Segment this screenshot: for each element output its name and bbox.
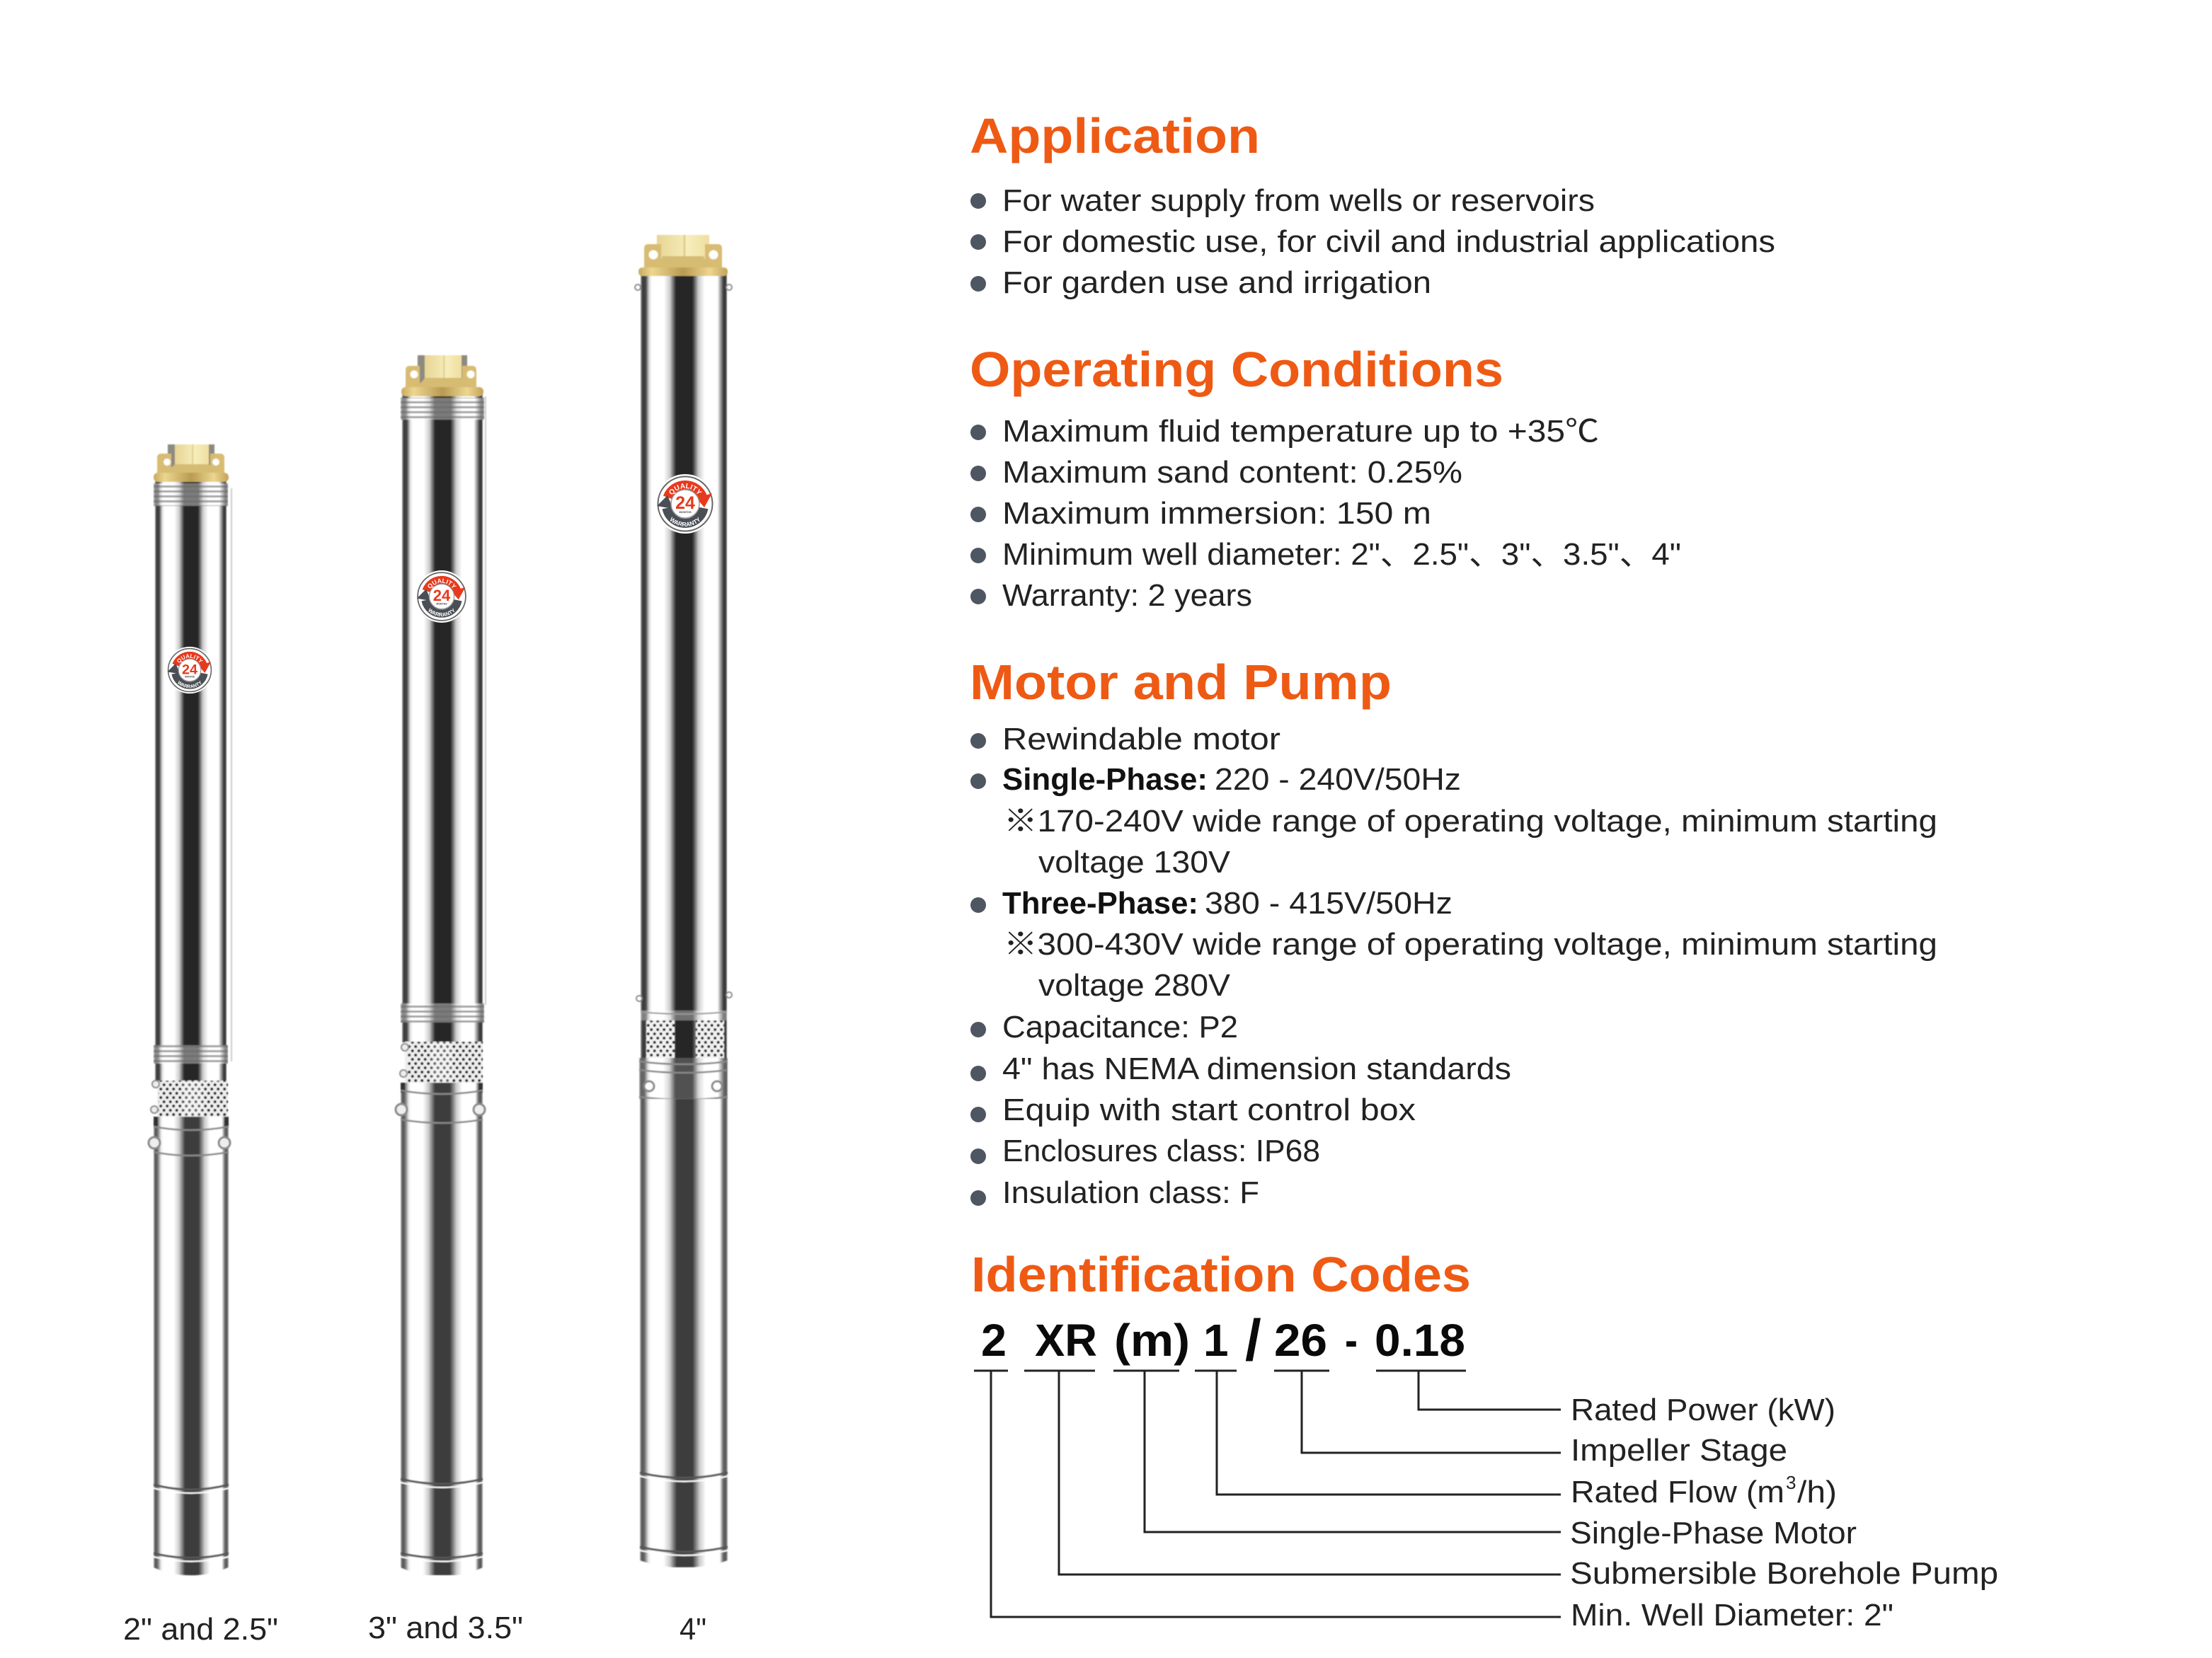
badge: 24 months quality warranty xyxy=(657,474,714,534)
bullet list: application xyxy=(970,183,1775,300)
model code: / xyxy=(1245,1308,1261,1373)
model code: XR xyxy=(1035,1315,1097,1366)
pump: 4 inch xyxy=(634,234,733,1568)
pump size labels: 2" and 2.5" xyxy=(123,1612,278,1647)
badge: 24 months quality warranty: MONTHS xyxy=(679,510,692,514)
badge: 24 months quality warranty: QUALITY xyxy=(670,483,702,494)
heading: application: Application xyxy=(970,108,1260,163)
badge: 24 months quality warranty: WARRANTY xyxy=(670,517,699,526)
model code: 1 xyxy=(1203,1315,1229,1366)
panel: identification codes xyxy=(971,1247,1998,1633)
bullet list: motor and pump: Single-Phase: xyxy=(1002,762,1208,797)
bullet list: motor and pump: Equip with start control box xyxy=(1002,1093,1416,1127)
bullet list: motor and pump: 220 - 240V/50Hz xyxy=(1215,762,1461,797)
bullet list: motor and pump: voltage 280V xyxy=(1038,968,1231,1003)
pump: 3 inch and 3.5 inch xyxy=(394,355,487,1576)
panel: operating conditions xyxy=(970,342,1681,613)
badge: 24 months quality warranty: QUALITY xyxy=(428,579,457,588)
badge: 24 months quality warranty: MONTHS xyxy=(185,675,195,678)
bullet list: operating conditions: Maximum fluid temperature up to +35℃ xyxy=(1002,414,1599,449)
bullet list: motor and pump: 380 - 415V/50Hz xyxy=(1205,886,1452,921)
pump size labels: 3" and 3.5" xyxy=(368,1611,523,1645)
bullet list: application: For water supply from wells or reservoirs xyxy=(1002,183,1595,218)
heading: operating conditions: Operating Conditions xyxy=(970,342,1503,397)
bullet list: operating conditions: Warranty: 2 years xyxy=(1002,578,1252,613)
model code: 26 xyxy=(1274,1315,1327,1366)
bullet list: operating conditions: Maximum immersion: 150 m xyxy=(1002,496,1431,531)
badge: 24 months quality warranty: WARRANTY xyxy=(429,608,454,617)
bullet list: motor and pump: ※170-240V wide range of operating voltage, minimum starting xyxy=(1004,804,1937,839)
code legend labels: Impeller Stage xyxy=(1571,1433,1787,1468)
bullet list: motor and pump: Enclosures class: IP68 xyxy=(1002,1134,1320,1168)
badge: 24 months quality warranty xyxy=(416,570,466,623)
code legend labels: Single-Phase Motor xyxy=(1570,1516,1857,1550)
badge: 24 months quality warranty: WARRANTY xyxy=(178,681,201,688)
model code: - xyxy=(1345,1315,1358,1366)
bullet list: motor and pump: Three-Phase: xyxy=(1002,886,1198,921)
bullet list: operating conditions xyxy=(970,414,1681,613)
code legend labels: 3 xyxy=(1786,1472,1796,1493)
model code xyxy=(981,1308,1465,1373)
code legend labels: Rated Flow (m xyxy=(1571,1475,1784,1509)
bullet list: operating conditions: Maximum sand content: 0.25% xyxy=(1002,455,1462,490)
badge: 24 months quality warranty: MONTHS xyxy=(436,602,447,605)
model code: 2 xyxy=(981,1315,1007,1366)
code legend labels: Rated Power (kW) xyxy=(1571,1393,1835,1427)
badge: 24 months quality warranty xyxy=(167,647,212,693)
bullet list: operating conditions: Minimum well diameter: 2"、2.5"、3"、3.5"、4" xyxy=(1002,537,1681,572)
panel: application xyxy=(970,108,1775,300)
code connector lines xyxy=(974,1371,1561,1617)
bullet list: motor and pump: Insulation class: F xyxy=(1002,1175,1259,1210)
bullet list: motor and pump: ※300-430V wide range of operating voltage, minimum starting xyxy=(1004,927,1937,962)
heading: identification codes: Identification Codes xyxy=(971,1247,1471,1302)
bullet list: motor and pump: Capacitance: P2 xyxy=(1002,1010,1238,1044)
bullet list: motor and pump: Rewindable motor xyxy=(1002,722,1280,756)
bullet list: motor and pump xyxy=(970,722,1937,1210)
badge: 24 months quality warranty: 24 xyxy=(675,493,695,513)
model code: (m) xyxy=(1114,1315,1190,1366)
badge: 24 months quality warranty: QUALITY xyxy=(177,654,203,662)
code legend labels: Submersible Borehole Pump xyxy=(1570,1556,1998,1591)
panel: motor and pump xyxy=(970,655,1937,1210)
code legend labels: Min. Well Diameter: 2" xyxy=(1571,1598,1893,1633)
code legend labels xyxy=(1570,1393,1998,1633)
pump size labels xyxy=(123,1611,706,1647)
badge: 24 months quality warranty: 24 xyxy=(433,587,451,604)
bullet list: motor and pump: voltage 130V xyxy=(1038,845,1231,880)
bullet list: application: For garden use and irrigation xyxy=(1002,265,1431,300)
badge: 24 months quality warranty: 24 xyxy=(182,662,197,678)
code legend labels: /h) xyxy=(1797,1475,1837,1509)
pump size labels: 4" xyxy=(680,1612,706,1647)
heading: motor and pump: Motor and Pump xyxy=(970,655,1392,710)
bullet list: application: For domestic use, for civil and industrial applications xyxy=(1002,224,1775,259)
bullet list: motor and pump: 4" has NEMA dimension standards xyxy=(1002,1052,1511,1086)
model code: 0.18 xyxy=(1375,1315,1465,1366)
pump: 2 inch and 2.5 inch xyxy=(147,444,232,1577)
